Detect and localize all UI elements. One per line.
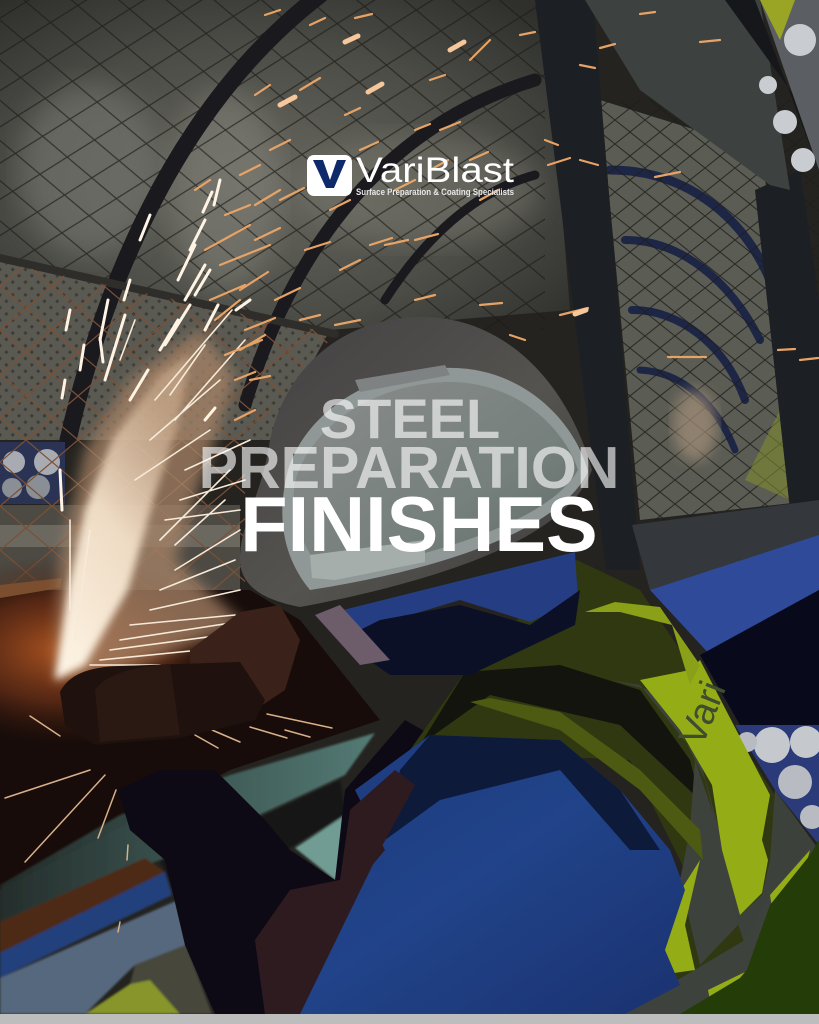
grinder and gloved hand xyxy=(60,605,300,745)
yellow highlight on shoulder xyxy=(585,602,700,685)
dark sleeve and glove xyxy=(118,720,470,1014)
blue jacket xyxy=(270,735,685,1014)
bottom strip xyxy=(0,1014,819,1024)
sparks below the grinder xyxy=(5,714,332,932)
reflective grey band xyxy=(610,680,810,945)
pipe across left xyxy=(0,505,240,590)
dark tunnel arches xyxy=(0,0,535,440)
white spark streaks xyxy=(60,180,250,510)
blue steel beam right xyxy=(632,500,819,725)
studded panel: left xyxy=(0,442,65,504)
main yellow panel xyxy=(640,660,770,915)
logo badge with V xyxy=(307,155,352,196)
vest dark olive shoulder xyxy=(410,560,819,1014)
logo tagline: Surface Preparation & Coating Specialists xyxy=(356,187,514,197)
title line: steel: STEEL xyxy=(320,387,500,450)
black shadow band xyxy=(420,665,700,800)
title xyxy=(199,387,619,568)
mesh tunnel dome panel xyxy=(0,0,570,330)
blue hood xyxy=(315,552,580,675)
thin yellow edge stripe xyxy=(470,698,703,860)
title line: preparation: PREPARATION xyxy=(199,435,619,501)
hard hat with visor xyxy=(240,317,592,607)
logo wordmark: VariBlast xyxy=(356,151,514,190)
warm steel ground with glow xyxy=(0,555,380,890)
title line: finishes: FINISHES xyxy=(240,482,598,568)
lower left dotted panel xyxy=(0,260,330,440)
studded panel: lower right xyxy=(735,725,819,845)
vest lettering: Vari xyxy=(671,676,735,751)
brown mesh across left xyxy=(0,262,335,600)
dark green corner xyxy=(680,840,819,1014)
bright top arcs xyxy=(280,36,586,314)
dark steel columns xyxy=(535,0,819,570)
right tunnel section with curved bands xyxy=(600,100,819,520)
lower left teal panel and beams xyxy=(0,733,375,1014)
logo xyxy=(307,151,514,197)
welder body: arm, jacket, vest xyxy=(118,560,819,1014)
studded panels: top right xyxy=(759,0,819,172)
orange spark streaks xyxy=(195,10,818,420)
